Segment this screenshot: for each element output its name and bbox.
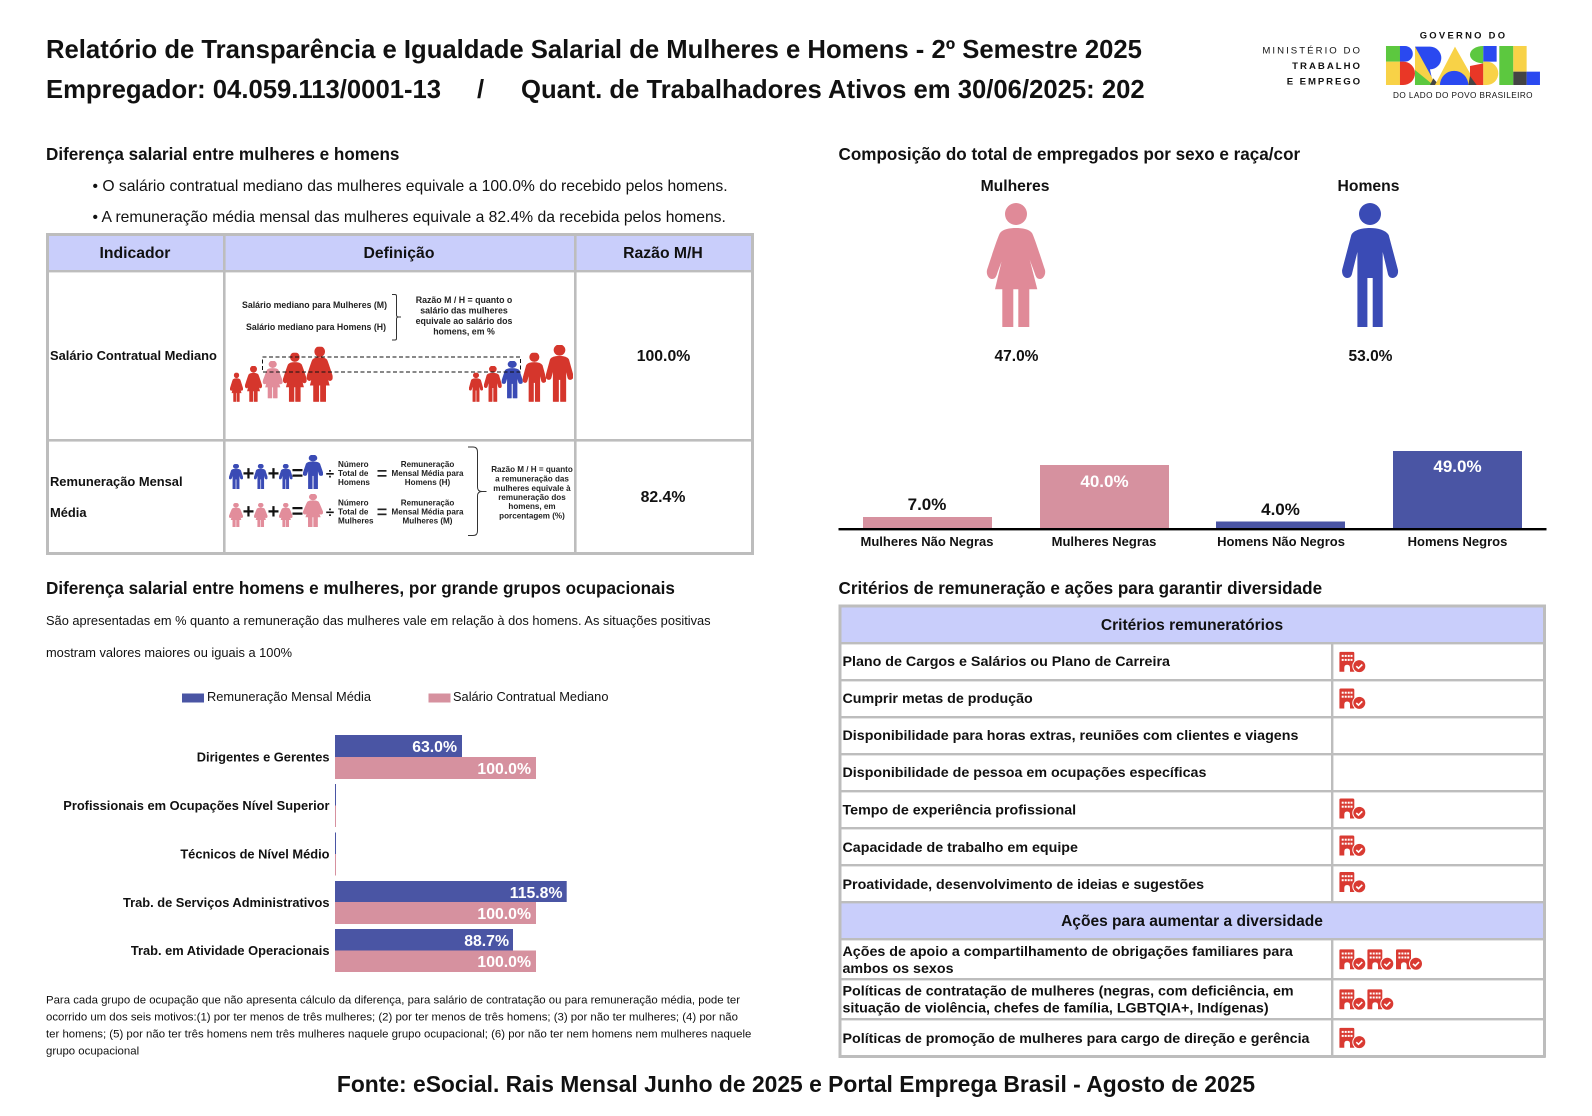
diagram: remuneração média: Número — [338, 460, 369, 469]
text block: explicação: São apresentadas em % quanto a remuneração das mulheres vale em relação à dos homens. As situações positivas — [46, 613, 711, 628]
diagram: remuneração média: Homens (H) — [405, 478, 451, 487]
row label: salário contratual mediano: Salário Contratual Mediano — [50, 348, 217, 363]
diagram: remuneração média: Mensal Média para — [392, 469, 464, 478]
pictogram: homens — [1338, 178, 1400, 365]
diagram: remuneração média: homens, em — [508, 502, 556, 511]
action labels: situação de violência, chefes de família, LGBTQIA+, Indígenas) — [842, 1000, 1269, 1016]
criteria labels: Disponibilidade de pessoa em ocupações específicas — [842, 765, 1206, 781]
diagram: salário mediano: Razão M / H = quanto o — [416, 295, 513, 305]
logo: Ministério do Trabalho e Emprego: MINISTÉRIO DO — [1262, 46, 1362, 56]
footnote: ter homens; (5) por não ter três homens nem três mulheres naquele grupo ocupacional; (6) por não ter nem homens nem mulheres naquele — [46, 1028, 751, 1040]
bullet text block: • O salário contratual mediano das mulheres equivale a 100.0% do recebido pelos homens. — [92, 178, 728, 195]
criteria labels — [842, 654, 1298, 893]
diagram: remuneração média: + — [243, 501, 254, 523]
logo: Ministério do Trabalho e Emprego: E EMPREGO — [1287, 76, 1362, 88]
footnote: Para cada grupo de ocupação que não apresenta cálculo da diferença, para salário de contratação ou para remuneração média, pode ter — [46, 994, 740, 1006]
legend — [182, 689, 608, 704]
row label: remuneração mensal média — [50, 474, 183, 520]
bar chart: composição por raça/cor: 7.0% — [908, 495, 946, 514]
diagram: remuneração média: ÷ — [326, 466, 334, 482]
icons: criteria present — [1339, 652, 1423, 1049]
bar chart: grupos ocupacionais — [63, 735, 567, 972]
criteria labels: Tempo de experiência profissional — [842, 802, 1076, 818]
text block: explicação: mostram valores maiores ou iguais a 100% — [46, 645, 292, 660]
bullet text block: • A remuneração média mensal das mulheres equivale a 82.4% da recebida pelos homens. — [92, 209, 726, 226]
title: Empregador: 04.059.113/0001-13 — [46, 76, 441, 104]
pictogram: mulheres: 47.0% — [995, 348, 1039, 365]
section header: critérios remuneratórios: Critérios remuneratórios — [1101, 617, 1284, 634]
table header — [100, 245, 703, 262]
bar chart: composição por raça/cor: 4.0% — [1261, 500, 1300, 519]
diagram: salário mediano: homens, em % — [433, 326, 495, 336]
diagram: salário mediano: equivale ao salário dos — [416, 316, 513, 326]
bar chart: composição por raça/cor: Mulheres Não Negras — [861, 534, 993, 549]
value: 82.4%: 82.4% — [641, 489, 685, 506]
row label: remuneração mensal média: Média — [50, 505, 87, 520]
bar chart: composição por raça/cor — [838, 451, 1546, 549]
criteria labels: Disponibilidade para horas extras, reuniões com clientes e viagens — [842, 728, 1298, 744]
bar chart: grupos ocupacionais: 100.0% — [477, 906, 531, 923]
table header: Indicador — [100, 245, 170, 262]
criteria labels: Proatividade, desenvolvimento de ideias e sugestões — [842, 877, 1204, 893]
title: Quant. de Trabalhadores Ativos em 30/06/2025: 202 — [521, 76, 1145, 104]
table header: Definição — [364, 245, 434, 262]
panel: indicator table — [46, 233, 754, 555]
bar chart: composição por raça/cor: 40.0% — [1080, 472, 1129, 491]
criteria labels: Plano de Cargos e Salários ou Plano de Carreira — [842, 654, 1171, 670]
section header: ações: Ações para aumentar a diversidade — [1061, 913, 1323, 930]
bar chart: grupos ocupacionais: 115.8% — [510, 885, 562, 902]
pictogram: homens: Homens — [1338, 178, 1400, 195]
bar chart: grupos ocupacionais: 100.0% — [477, 954, 531, 971]
table header: Razão M/H — [623, 245, 703, 262]
title: Relatório de Transparência e Igualdade Salarial de Mulheres e Homens - 2º Semestre 2025 — [46, 36, 1142, 64]
value: 100.0%: 100.0% — [637, 348, 690, 365]
bullet text block — [92, 178, 728, 226]
footnote: grupo ocupacional — [46, 1046, 139, 1058]
action labels: ambos os sexos — [842, 961, 954, 977]
diagram: salário mediano — [230, 294, 573, 402]
legend: Salário Contratual Mediano — [453, 689, 608, 704]
legend: Remuneração Mensal Média — [207, 689, 372, 704]
bar chart: composição por raça/cor: Mulheres Negras — [1052, 534, 1156, 549]
heading: diferença salarial: Diferença salarial entre mulheres e homens — [46, 145, 399, 164]
heading: critérios: Critérios de remuneração e ações para garantir diversidade — [838, 579, 1322, 598]
bar chart: grupos ocupacionais: Dirigentes e Gerentes — [197, 750, 330, 764]
bar chart: grupos ocupacionais: 63.0% — [412, 739, 457, 756]
bar chart: grupos ocupacionais: 88.7% — [464, 933, 509, 950]
action labels: Ações de apoio a compartilhamento de obrigações familiares para — [842, 944, 1294, 960]
diagram: remuneração média: Mulheres (M) — [403, 516, 453, 526]
action labels — [842, 944, 1311, 1047]
diagram: remuneração média: porcentagem (%) — [499, 512, 565, 520]
bar chart: grupos ocupacionais: Trab. em Atividade Operacionais — [131, 943, 330, 958]
diagram: salário mediano: Salário mediano para Mulheres (M) — [242, 300, 387, 310]
source line: Fonte: eSocial. Rais Mensal Junho de 2025 e Portal Emprega Brasil - Agosto de 2025 — [337, 1071, 1255, 1097]
diagram: remuneração média: Mensal Média para — [392, 508, 464, 516]
logo: Governo do Brasil: DO LADO DO POVO BRASILEIRO — [1393, 91, 1533, 100]
criteria labels: Capacidade de trabalho em equipe — [842, 840, 1078, 856]
diagram: remuneração média: Homens — [338, 478, 370, 487]
diagram: remuneração média: Razão M / H = quanto — [491, 465, 573, 474]
pictogram: mulheres — [981, 178, 1050, 365]
action labels: Políticas de promoção de mulheres para cargo de direção e gerência — [842, 1031, 1311, 1047]
diagram: remuneração média: Número — [338, 498, 369, 508]
panel: critérios table — [838, 604, 1546, 1058]
diagram: remuneração média: + — [243, 463, 254, 485]
footnote — [46, 994, 751, 1058]
diagram: remuneração média: Total de — [338, 469, 369, 478]
diagram: remuneração média: mulheres equivale à — [493, 484, 571, 493]
diagram: remuneração média: = — [292, 501, 303, 523]
heading: grupos ocupacionais: Diferença salarial entre homens e mulheres, por grande grupos ocupacionais — [46, 579, 675, 598]
action labels: Políticas de contratação de mulheres (negras, com deficiência, em — [842, 984, 1294, 1000]
footnote: ocorrido um dos seis motivos:(1) por ter menos de três mulheres; (2) por ter menos de três homens; (3) por não ter mulheres; (4) por não — [46, 1012, 738, 1024]
bar chart: grupos ocupacionais: Profissionais em Ocupações Nível Superior — [63, 798, 330, 813]
bar chart: composição por raça/cor: Homens Não Negros — [1217, 534, 1345, 549]
bar chart: grupos ocupacionais: Técnicos de Nível Médio — [180, 846, 330, 862]
diagram: remuneração média: = — [292, 463, 303, 485]
logo: Ministério do Trabalho e Emprego: TRABALHO — [1292, 61, 1362, 72]
diagram: remuneração média — [229, 447, 573, 536]
diagram: remuneração média: + — [268, 463, 279, 485]
diagram: remuneração média: Mulheres — [338, 516, 374, 526]
diagram: remuneração média: a remuneração das — [495, 474, 569, 484]
bar chart: composição por raça/cor: 49.0% — [1433, 457, 1482, 476]
diagram: remuneração média: Remuneração — [401, 498, 454, 508]
diagram: remuneração média: remuneração dos — [498, 493, 566, 502]
bar chart: grupos ocupacionais: 100.0% — [477, 761, 531, 778]
pictogram: homens: 53.0% — [1349, 348, 1393, 365]
heading: composição: Composição do total de empregados por sexo e raça/cor — [838, 145, 1301, 164]
title: / — [477, 76, 484, 104]
bar chart: grupos ocupacionais: Trab. de Serviços Administrativos — [123, 895, 330, 910]
logo: Ministério do Trabalho e Emprego — [1262, 46, 1362, 88]
logo: Governo do Brasil: GOVERNO DO — [1420, 30, 1507, 40]
text block: explicação — [46, 613, 711, 660]
diagram: salário mediano: salário das mulheres — [420, 306, 508, 316]
pictogram: mulheres: Mulheres — [981, 178, 1050, 195]
bar chart: composição por raça/cor: Homens Negros — [1408, 534, 1507, 549]
diagram: salário mediano: Salário mediano para Homens (H) — [246, 322, 386, 332]
diagram: remuneração média: ÷ — [326, 504, 334, 521]
diagram: remuneração média: Remuneração — [401, 460, 454, 469]
row label: remuneração mensal média: Remuneração Mensal — [50, 474, 183, 489]
logo: Governo do Brasil — [1386, 30, 1540, 100]
criteria labels: Cumprir metas de produção — [842, 691, 1033, 707]
diagram: remuneração média: + — [268, 501, 279, 523]
title — [46, 36, 1145, 104]
diagram: remuneração média: Total de — [338, 508, 369, 516]
